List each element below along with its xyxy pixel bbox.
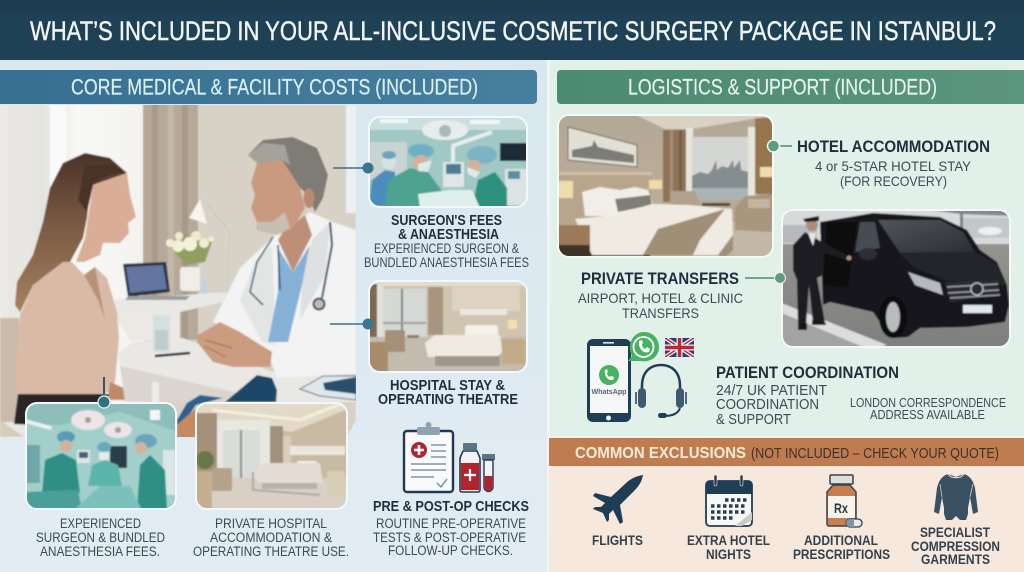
text: pre and post-op checks: FOLLOW-UP CHECKS.	[388, 543, 513, 558]
text: hospital stay	[378, 377, 518, 408]
caption: private hospital: OPERATING THEATRE USE.	[193, 544, 349, 559]
surgeon right	[137, 455, 167, 510]
text: patient coordination: PATIENT COORDINATION	[716, 363, 899, 382]
doctor coat	[213, 212, 356, 378]
text: hotel accommodation: 4 or 5-STAR HOTEL STAY	[815, 158, 972, 174]
icon: plane	[593, 475, 643, 524]
text: patient coordination: COORDINATION	[716, 397, 819, 413]
text: patient coordination: & SUPPORT	[716, 412, 791, 428]
text: patient coordination: 24/7 UK PATIENT	[716, 383, 827, 399]
frame: operating theatre bottom left	[26, 403, 176, 509]
back desk	[113, 292, 227, 315]
bed	[588, 251, 651, 256]
text: private transfers: PRIVATE TRANSFERS	[581, 269, 739, 288]
callout dot: surgeon	[333, 162, 374, 174]
patient and table	[27, 490, 82, 508]
text: hotel accommodation: (FOR RECOVERY)	[840, 173, 947, 189]
photo: hospital room right	[370, 282, 526, 371]
text: london address: ADDRESS AVAILABLE	[870, 408, 985, 422]
van	[820, 213, 1009, 338]
panel: core medical and facility costs	[0, 70, 537, 559]
label: specialist compression garments	[911, 525, 1000, 567]
woman blouse	[15, 262, 119, 398]
frame: hospital room right	[369, 281, 527, 372]
text: hotel accommodation: HOTEL ACCOMMODATION	[797, 137, 990, 156]
text: surgeon's fees: SURGEON'S FEES	[391, 212, 502, 229]
text: pre and post-op checks: TESTS & POST-OPERATIVE	[373, 530, 526, 545]
frame: private hospital room bottom	[196, 403, 347, 509]
caption: private hospital: PRIVATE HOSPITAL	[215, 516, 327, 531]
label: extra hotel nights	[687, 533, 770, 562]
icon: uk flag	[665, 338, 694, 357]
text: private transfers: TRANSFERS	[622, 305, 699, 321]
label: specialist compression garments: SPECIALIST	[920, 525, 991, 540]
lamp	[189, 199, 207, 224]
label: specialist compression garments: GARMENTS	[921, 552, 990, 567]
text: pre and post-op checks	[373, 498, 529, 558]
chauffeur	[793, 232, 848, 325]
caption: experienced surgeon: ANAESTHESIA FEES.	[40, 544, 160, 559]
caption: experienced surgeon: SURGEON & BUNDLED	[36, 530, 165, 545]
text: surgeon's fees	[364, 212, 529, 270]
frame: operating theatre top right	[369, 117, 527, 207]
callout dot: consultation	[98, 377, 110, 408]
glass and pen	[153, 315, 170, 352]
section heading: exclusions: COMMON EXCLUSIONS	[575, 445, 746, 462]
icon: phone with whatsapp	[587, 339, 631, 422]
navy case, leg and folder	[225, 375, 277, 402]
woman face	[76, 173, 136, 262]
front table	[118, 338, 356, 402]
icon: prescription bottle	[827, 475, 862, 527]
icon: clipboard and medical vials	[404, 422, 495, 492]
text: private transfers: AIRPORT, HOTEL & CLINIC	[578, 290, 743, 306]
surgeon two	[472, 172, 507, 208]
label: additional prescriptions	[793, 533, 890, 562]
vase and flowers	[180, 267, 200, 291]
doctor head	[251, 160, 305, 235]
panel: common exclusions	[549, 436, 1024, 567]
caption: private hospital	[193, 516, 349, 559]
label: additional prescriptions: PRESCRIPTIONS	[793, 547, 890, 562]
text: surgeon's fees: & ANAESTHESIA	[398, 226, 499, 243]
icon: headset	[636, 365, 686, 418]
section heading: core medical	[0, 70, 537, 104]
text: surgeon's fees: EXPERIENCED SURGEON &	[374, 241, 519, 256]
label: extra hotel nights: EXTRA HOTEL	[687, 533, 770, 548]
text: patient coordination	[716, 363, 899, 428]
patient sheet	[418, 190, 480, 208]
caption: experienced surgeon	[36, 516, 165, 559]
photo: private transfer van	[779, 207, 1013, 350]
text: hospital stay: HOSPITAL STAY &	[390, 377, 505, 394]
surgeon centre	[88, 460, 122, 486]
woman hand and skirt	[107, 382, 126, 401]
label: additional prescriptions: ADDITIONAL	[804, 533, 878, 548]
title banner	[0, 0, 1024, 60]
section heading: logistics	[557, 70, 1024, 104]
text: pre and post-op checks: PRE & POST-OP CHECKS	[373, 498, 529, 515]
photo: private hospital room bottom	[197, 404, 346, 508]
photo: hotel room	[555, 112, 776, 260]
label: extra hotel nights: NIGHTS	[706, 547, 751, 562]
nightstand	[555, 225, 590, 245]
photo: operating theatre top right	[370, 118, 526, 206]
laptop	[123, 262, 170, 297]
text: hospital stay: OPERATING THEATRE	[378, 391, 518, 408]
section heading: core medical: CORE MEDICAL & FACILITY COSTS (INCLUDED)	[71, 74, 478, 100]
frame: private transfer van	[782, 210, 1010, 347]
frame: hotel room	[558, 115, 773, 257]
photo: operating theatre bottom left	[27, 404, 175, 508]
callout: hotel accommodation	[768, 140, 792, 152]
surgeon left	[42, 453, 80, 493]
text: pre and post-op checks: ROUTINE PRE-OPERATIVE	[376, 516, 526, 531]
icon: prescription bottle: Rx	[834, 500, 848, 516]
caption: private hospital: ACCOMMODATION &	[210, 530, 332, 545]
label: specialist compression garments: COMPRESSION	[911, 539, 1000, 554]
text: surgeon's fees: BUNDLED ANAESTHESIA FEES	[364, 255, 529, 270]
panel: logistics and support	[555, 70, 1024, 428]
surgeon one	[384, 168, 442, 206]
icon: phone with whatsapp: WhatsApp	[592, 389, 626, 396]
text: private transfers	[578, 269, 743, 321]
chair	[0, 318, 19, 422]
text: hotel accommodation	[797, 137, 990, 189]
caption: experienced surgeon: EXPERIENCED	[60, 516, 141, 531]
callout: private transfers	[745, 272, 786, 284]
staff left	[382, 158, 396, 169]
photo: patient consultation with surgeon	[0, 100, 358, 440]
woman hair	[15, 153, 127, 312]
icon: calendar	[706, 475, 752, 526]
text: london address	[850, 396, 1006, 422]
section heading: logistics: LOGISTICS & SUPPORT (INCLUDED)	[628, 74, 937, 100]
stethoscope	[322, 222, 332, 298]
section heading: exclusions	[549, 436, 1024, 466]
label: flights: FLIGHTS	[592, 533, 643, 548]
icon: whatsapp bubble	[628, 332, 659, 361]
callout dot: hospital	[330, 318, 374, 330]
doctor hands	[197, 322, 272, 367]
icon: compression garment	[934, 474, 978, 520]
